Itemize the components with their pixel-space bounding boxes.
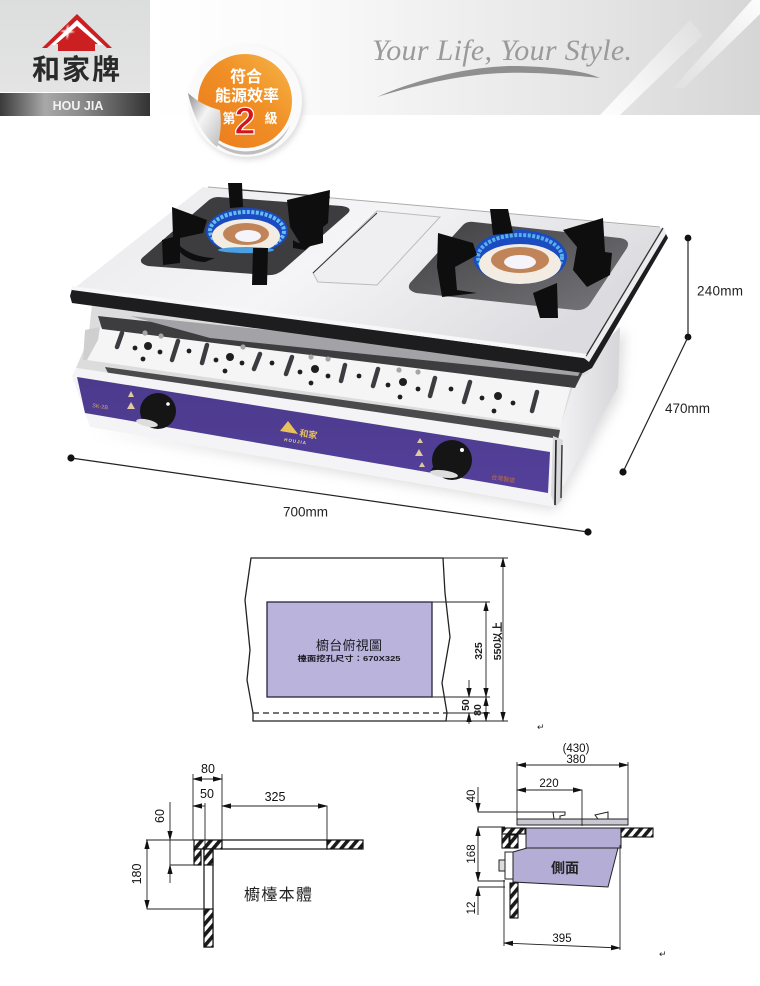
purple control panel [77,377,550,493]
left knob [136,393,176,429]
slogan [372,34,632,97]
cutout label [298,638,400,663]
diagram: side view: 220 [539,778,559,790]
right side panel [553,327,620,487]
height dimension: 240mm [697,284,743,298]
diagram: cabinet section: 325 [265,790,285,804]
diagram: side view [466,743,653,950]
front fascia [72,368,558,507]
depth dimension: 470mm [665,401,710,416]
side label: 側面 [551,860,579,876]
logo block [0,0,150,116]
stove body [499,812,628,887]
diagram: cabinet section: 50 [200,787,214,801]
center inset [313,211,440,285]
diagram: side view: 395 [552,933,572,945]
flame [473,230,567,284]
diagram: counter top view: 325 [473,642,485,660]
return marks: ↵ [659,949,667,959]
dimensions [146,774,327,909]
model label: SK-2B [92,403,109,412]
diagram: side view: 380 [566,754,586,766]
counter and wall [194,840,363,947]
grates [437,209,612,318]
diagram: side view: 40 [466,790,478,802]
brand bar: HOU JIA [53,99,103,113]
panel logo [280,421,318,446]
diagram: counter top view [245,558,508,724]
sticker text: 符合 [230,67,262,86]
diagram: side view: (430) [563,743,590,755]
diagram: cabinet section [130,762,363,947]
cutout [267,602,432,697]
sticker text: 能源效率 [215,86,279,105]
left burner [141,183,350,285]
sticker text [215,67,279,143]
energy efficiency sticker [188,45,304,160]
right end cap [551,436,563,507]
front rim [70,232,668,373]
sticker text: 第 [222,111,236,126]
width dimension: 700mm [283,504,328,520]
sticker text: 2 [234,101,256,143]
flame marks left [127,391,135,409]
stove shadow [90,330,625,510]
right burner [409,209,628,318]
icon: red roof logo [42,14,112,51]
cutout label: 檯面挖孔尺寸：670X325 [298,653,400,663]
counter hatches [502,828,653,918]
brand name: 和家牌 [32,54,120,85]
slogan: Your Life, Your Style. [372,34,632,67]
diagram: counter top view: 550以上 [491,621,504,660]
diagram: counter top view: 80 [472,704,484,716]
panel logo: 和家 [299,427,318,441]
panel logo: HOUJIA [284,437,307,446]
sticker text: 級 [264,111,278,126]
right knob [430,440,472,480]
cutout label: 櫥台俯視圖 [316,638,382,653]
diagram: cabinet section: 60 [153,809,167,823]
height dimension [685,235,743,340]
diagram: counter top view: 50 [460,699,472,711]
depth dimension [619,337,710,476]
return marks [537,722,667,959]
header band [150,0,760,115]
dimensions [478,762,628,950]
counter outline [245,558,450,721]
dimensions [432,558,508,724]
diagram: cabinet section: 80 [201,762,215,776]
cooktop plate [72,187,663,360]
diagram: side view: 12 [466,902,478,914]
diagram: side view: 168 [466,844,478,864]
brand bar [0,93,150,116]
return marks: ↵ [537,722,545,732]
flame [206,208,288,254]
perforated panel [83,316,585,440]
vent holes [133,342,515,413]
made in Taiwan label: 台灣製造 [491,473,516,485]
section label: 櫥檯本體 [244,886,312,904]
peeled corner [188,93,221,147]
flame marks right [415,438,425,467]
grates [162,183,330,285]
vent bars [117,333,537,411]
width dimension [67,454,592,536]
product: gas stove [70,183,668,510]
diagram: cabinet section: 180 [130,864,144,884]
front recess [76,305,590,440]
